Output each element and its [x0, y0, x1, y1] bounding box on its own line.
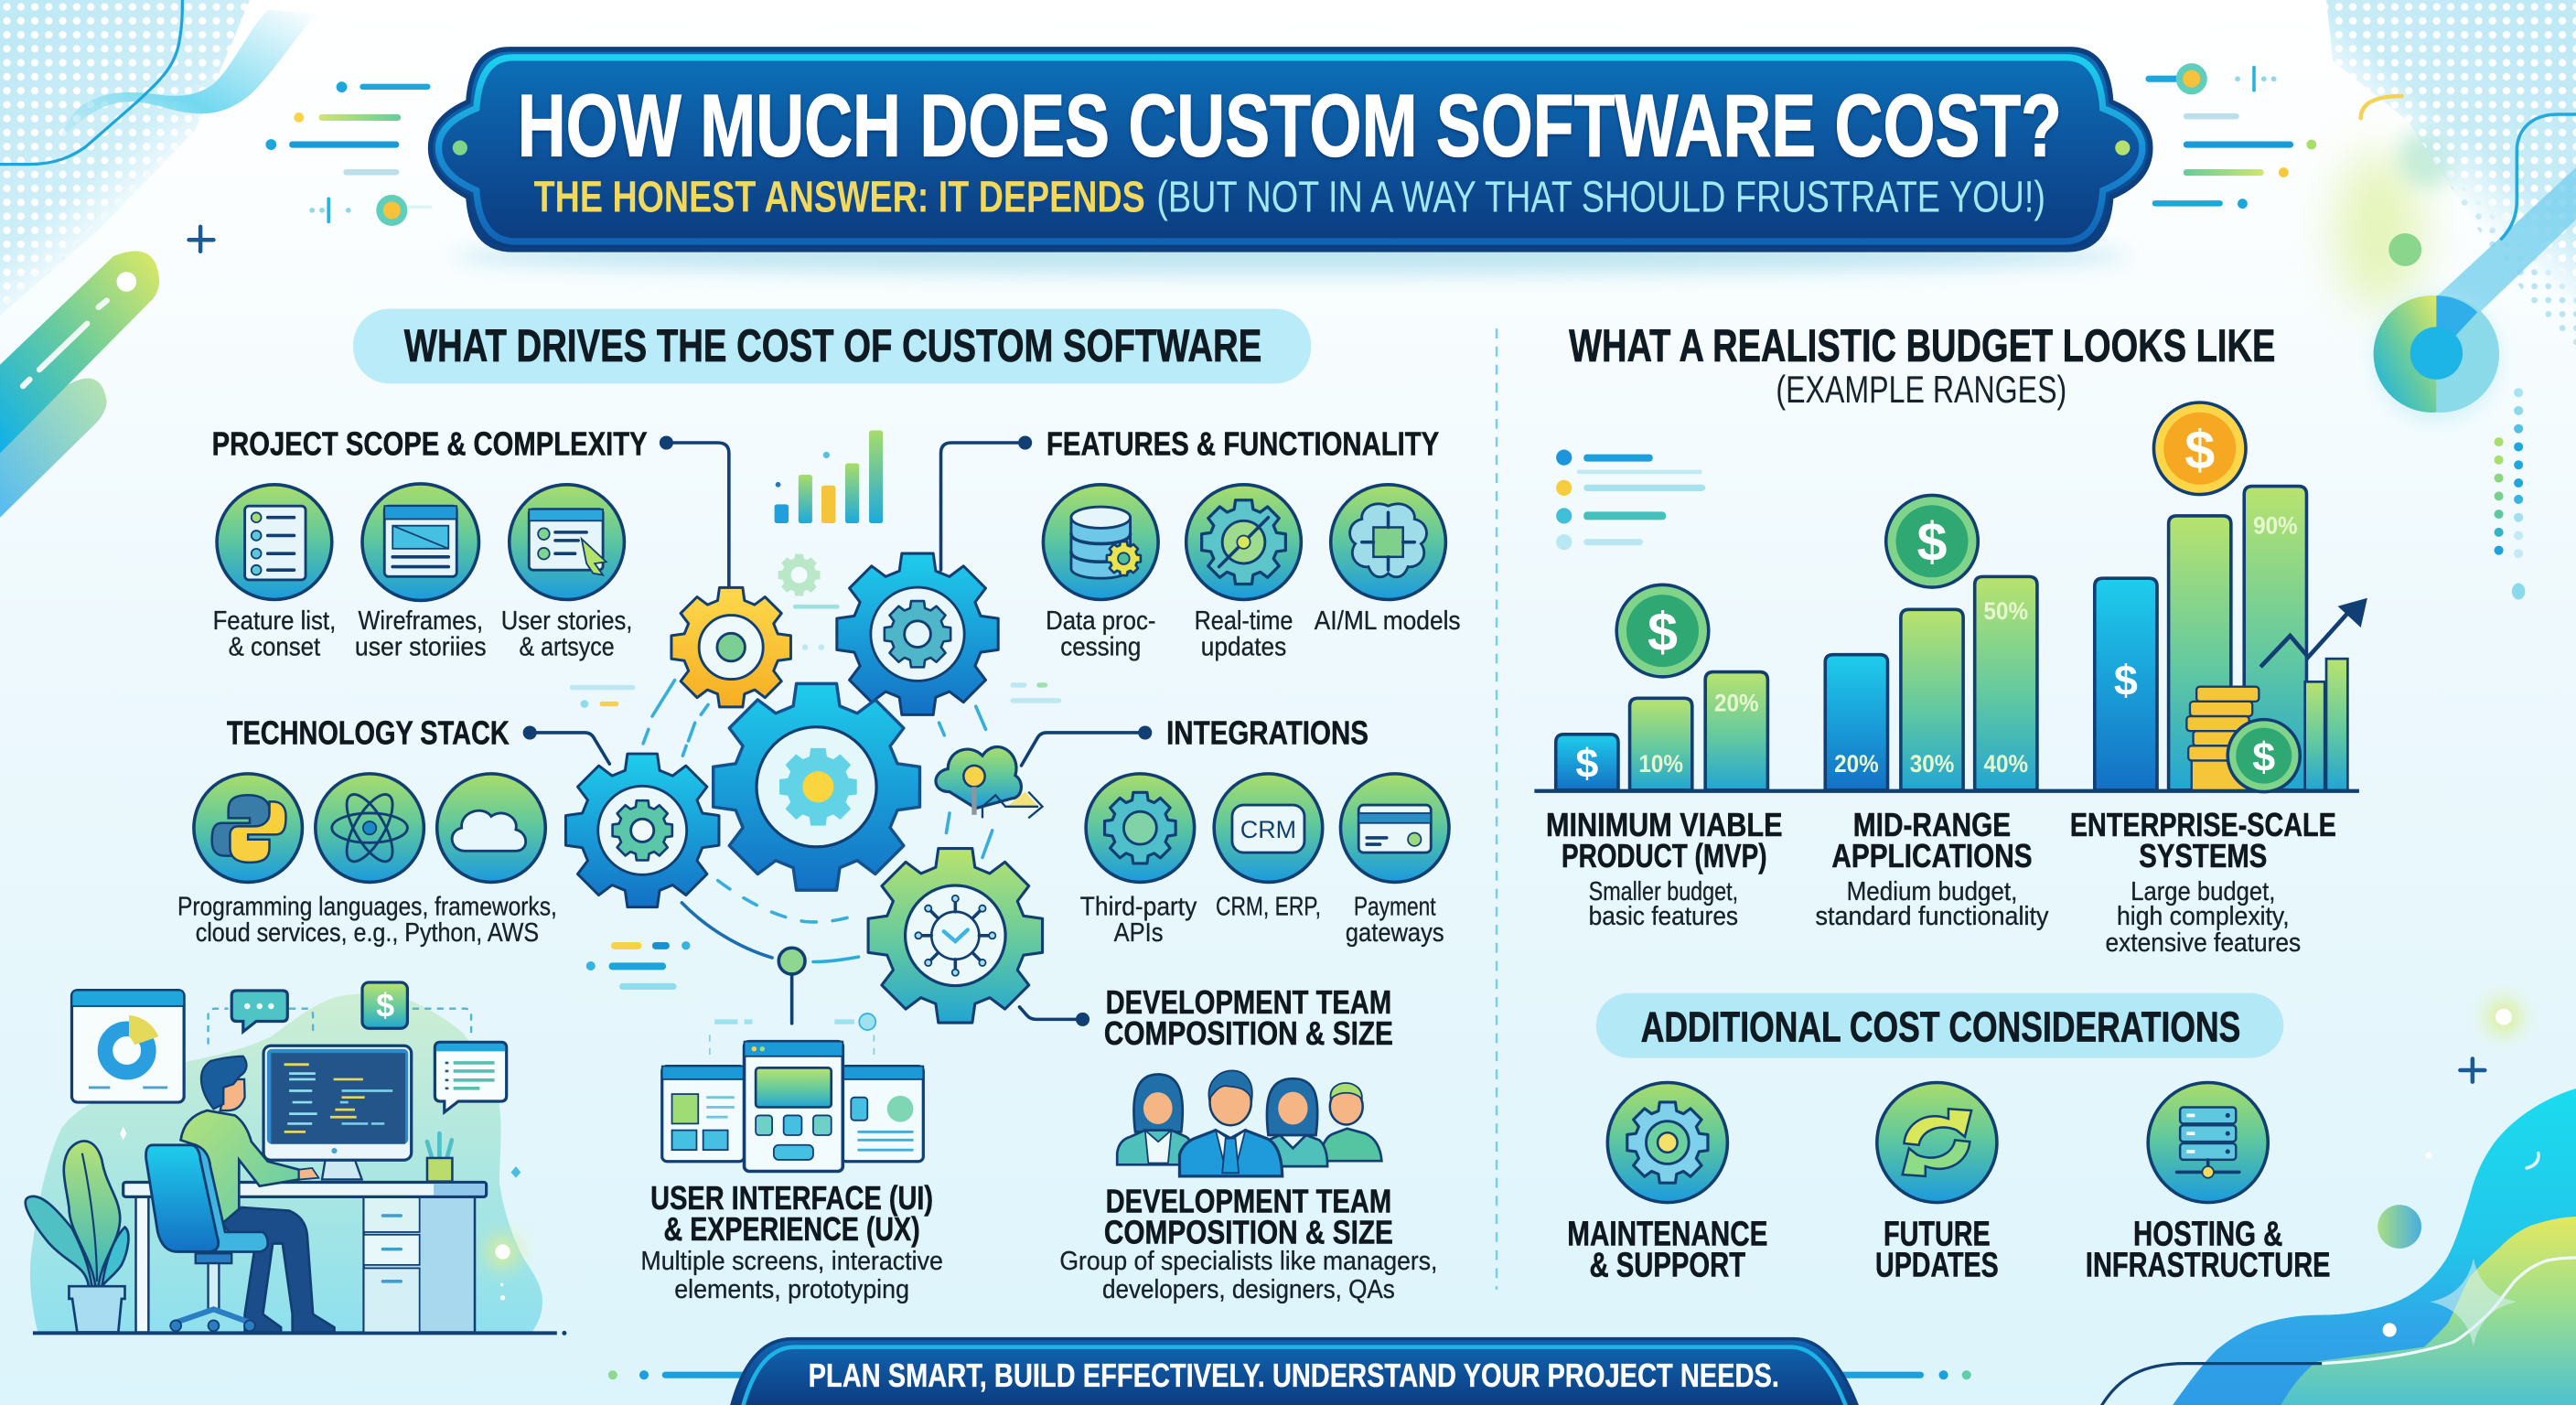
- item: maintenance and support: [1567, 1083, 1767, 1283]
- icon: UI screens: [662, 1014, 923, 1171]
- icon: real-time updates: [1186, 485, 1301, 600]
- title text: HOW MUCH DOES CUSTOM SOFTWARE COST?: [518, 76, 2062, 176]
- labels: features items: [1046, 606, 1461, 662]
- icon: third-party APIs: [1086, 774, 1195, 882]
- label: mid-range applications: standard functionality: [1815, 902, 2049, 931]
- group: MVP bars: [1556, 672, 1767, 790]
- label: hosting: INFRASTRUCTURE: [2086, 1245, 2331, 1283]
- plant: [26, 1141, 128, 1332]
- icon: green coin mid-range: $: [1917, 510, 1948, 572]
- subtitle: [534, 173, 2045, 222]
- icon: data processing: [1043, 485, 1158, 600]
- heading pill: additional cost considerations: ADDITIONAL COST CONSIDERATIONS: [1641, 1003, 2240, 1051]
- labels: project scope items: user storiies: [355, 633, 487, 662]
- description: development team: Group of specialists like managers,: [1059, 1247, 1437, 1276]
- description: UI and UX: Multiple screens, interactive: [640, 1247, 943, 1276]
- icon: python: [194, 774, 302, 882]
- illustration: developer at desk: [26, 982, 566, 1335]
- description: UI and UX: elements, prototyping: [674, 1275, 909, 1304]
- subtitle: THE HONEST ANSWER: IT DEPENDS: [534, 173, 1145, 222]
- labels: features items: AI/ML models: [1315, 606, 1461, 636]
- group: mid-range bars: 40%: [1984, 750, 2028, 778]
- labels: features items: cessing: [1060, 633, 1141, 662]
- icon: gold coin enterprise: $: [2184, 419, 2215, 480]
- chart: small bars above gears: [775, 431, 883, 523]
- section: realistic budget heading: WHAT A REALISTIC BUDGET LOOKS LIKE: [1569, 319, 2275, 371]
- icon: cloud services: [437, 774, 545, 882]
- section: features and functionality: FEATURES & FUNCTIONALITY: [1046, 424, 1439, 462]
- section: integrations: INTEGRATIONS: [1166, 714, 1368, 752]
- labels: features items: Data proc-: [1046, 606, 1155, 636]
- icon: gold coin enterprise: [2153, 402, 2246, 495]
- label: mid-range applications: APPLICATIONS: [1831, 837, 2033, 874]
- heading: UI and UX: & EXPERIENCE (UX): [664, 1210, 920, 1248]
- person torso: [181, 1056, 318, 1224]
- icon: green coin MVP: [1616, 585, 1709, 677]
- label: enterprise-scale systems: [2070, 806, 2336, 958]
- person: woman right: [1267, 1078, 1327, 1166]
- gear: blue top right: [837, 553, 998, 714]
- heading: development team: DEVELOPMENT TEAM: [1106, 1182, 1391, 1219]
- person: woman left: [1117, 1075, 1195, 1164]
- dollar tile: $: [376, 987, 394, 1024]
- icon: CRM: CRM: [1240, 816, 1296, 843]
- icon: coin stack and rising arrow: [2186, 598, 2367, 792]
- label: minimum viable product: Smaller budget,: [1589, 877, 1738, 906]
- dollar tile: [362, 982, 407, 1028]
- label: enterprise-scale systems: high complexity,: [2117, 902, 2290, 931]
- decoration: top-right bars: [2145, 63, 2316, 209]
- group: mid-range bars: [1825, 576, 2037, 790]
- icon: feature list: [217, 485, 332, 600]
- section: integrations: [1022, 714, 1449, 948]
- label: future updates: [1875, 1214, 1999, 1283]
- labels: project scope items: & conset: [229, 633, 320, 662]
- section: realistic budget heading: (EXAMPLE RANGES): [1776, 369, 2066, 411]
- label: future updates: FUTURE: [1884, 1214, 1991, 1252]
- group: mid-range bars: 30%: [1910, 750, 1954, 778]
- heading: development team: COMPOSITION & SIZE: [1104, 1214, 1393, 1251]
- speech bubble: [231, 991, 287, 1032]
- icon: server rack: [2148, 1083, 2268, 1203]
- section: features and functionality: [941, 424, 1461, 662]
- chair: [146, 1145, 268, 1331]
- desk: [123, 1133, 487, 1332]
- icon: small pale gear: [778, 554, 820, 596]
- label: mid-range applications: Medium budget,: [1847, 877, 2017, 906]
- group: enterprise bars: [2095, 487, 2347, 790]
- section: technology stack: [177, 714, 609, 948]
- labels: project scope items: Wireframes,: [359, 606, 483, 636]
- label: enterprise-scale systems: SYSTEMS: [2139, 837, 2267, 874]
- dashboard window: [71, 991, 184, 1102]
- description: UI and UX: [640, 1247, 943, 1304]
- icon: refresh arrows: [1877, 1083, 1997, 1203]
- icon: green coin MVP: $: [1648, 601, 1678, 662]
- label: minimum viable product: PRODUCT (MVP): [1562, 837, 1767, 874]
- decoration: top-left bars: [265, 81, 432, 226]
- label: minimum viable product: [1546, 806, 1783, 931]
- section: development team people: [1059, 1070, 1437, 1304]
- group: MVP bars: $: [1575, 739, 1598, 786]
- decoration: top-right corner: [2326, 0, 2576, 600]
- group: enterprise bars: $: [2114, 657, 2138, 704]
- labels: integrations: [1080, 892, 1444, 948]
- monitor: [263, 1046, 412, 1179]
- icon: wireframes: [362, 484, 479, 600]
- label: minimum viable product: basic features: [1589, 902, 1738, 931]
- icon: connector pin: [778, 948, 805, 974]
- right speech bubble: [435, 1042, 507, 1112]
- gear: yellow: [671, 587, 790, 707]
- heading pill: what drives the cost: WHAT DRIVES THE COST OF CUSTOM SOFTWARE: [404, 319, 1261, 371]
- person legs: [220, 1207, 334, 1332]
- label: mid-range applications: MID-RANGE: [1853, 806, 2011, 843]
- footer banner: [731, 1339, 1858, 1405]
- label: enterprise-scale systems: extensive features: [2105, 928, 2301, 958]
- icon: maintenance gear: [1607, 1083, 1727, 1203]
- label: minimum viable product: MINIMUM VIABLE: [1546, 806, 1783, 843]
- icon: AI brain: [1331, 485, 1445, 600]
- label: maintenance: & SUPPORT: [1590, 1245, 1745, 1283]
- heading: UI and UX: [650, 1179, 933, 1248]
- labels: integrations: Payment: [1354, 892, 1436, 921]
- section: development team heading: COMPOSITION & SIZE: [1104, 1014, 1393, 1052]
- icon: green coin mid-range: [1886, 495, 1978, 587]
- decoration: small bars beside pin: [586, 941, 690, 990]
- heading pill: what drives the cost: [353, 309, 1311, 383]
- group: enterprise bars: 90%: [2253, 512, 2298, 540]
- label: maintenance: [1567, 1214, 1767, 1283]
- footer banner: PLAN SMART, BUILD EFFECTIVELY. UNDERSTAND YOUR PROJECT NEEDS.: [809, 1357, 1779, 1394]
- label: enterprise-scale systems: ENTERPRISE-SCALE: [2070, 806, 2336, 843]
- labels: integrations: CRM, ERP,: [1216, 892, 1321, 921]
- labels: features items: Real-time: [1195, 606, 1293, 636]
- subtitle: (BUT NOT IN A WAY THAT SHOULD FRUSTRATE YOU!): [1156, 173, 2045, 222]
- label: maintenance: MAINTENANCE: [1567, 1214, 1767, 1252]
- labels: technology stack: [177, 892, 557, 948]
- group: MVP bars: 10%: [1638, 750, 1683, 778]
- item: hosting and infrastructure: [2086, 1083, 2331, 1283]
- description: development team: developers, designers, QAs: [1102, 1275, 1395, 1304]
- labels: project scope items: [213, 606, 632, 662]
- gear: green bottom right: [868, 849, 1043, 1023]
- group: mid-range bars: 50%: [1984, 597, 2028, 625]
- label: future updates: UPDATES: [1875, 1245, 1999, 1283]
- section: technology stack: TECHNOLOGY STACK: [227, 714, 510, 752]
- icon: user stories: [510, 485, 624, 600]
- labels: project scope items: & artsyce: [520, 633, 615, 662]
- section: development team heading: DEVELOPMENT TEAM: [1106, 983, 1391, 1021]
- icon: cloud with bulb: [936, 747, 1043, 818]
- heading pill: additional cost considerations: [1596, 993, 2283, 1058]
- label: hosting: [2086, 1214, 2331, 1283]
- icon: CRM: [1214, 774, 1323, 882]
- gear: large central: [714, 683, 919, 890]
- label: hosting: HOSTING &: [2133, 1214, 2282, 1252]
- section: realistic budget heading: [1569, 319, 2275, 411]
- labels: technology stack: cloud services, e.g., Python, AWS: [196, 918, 539, 948]
- group: MVP bars: 20%: [1714, 690, 1759, 717]
- heading: UI and UX: USER INTERFACE (UI): [650, 1179, 933, 1217]
- chart: budget bars: [1534, 487, 2359, 791]
- icon: payment card: [1340, 774, 1449, 882]
- legend: chart key: [1556, 450, 1705, 550]
- person: man centre: [1179, 1070, 1283, 1176]
- item: future updates: [1875, 1083, 1999, 1283]
- section: user interface and experience: [640, 1014, 943, 1304]
- title banner: [431, 49, 2151, 274]
- label: enterprise-scale systems: Large budget,: [2131, 877, 2275, 906]
- section: project scope and complexity: PROJECT SCOPE & COMPLEXITY: [212, 424, 648, 462]
- decoration: bottom-right blob: [2101, 999, 2576, 1405]
- labels: project scope items: Feature list,: [213, 606, 336, 636]
- gear: blue left: [565, 754, 719, 907]
- section: development team heading: [1020, 983, 1393, 1052]
- labels: technology stack: Programming languages, frameworks,: [177, 892, 557, 921]
- dashed links: [209, 1009, 471, 1045]
- icon: coin stack and rising arrow: $: [2252, 733, 2275, 779]
- labels: integrations: APIs: [1114, 918, 1164, 948]
- footer decorations: [608, 1370, 1971, 1379]
- description: development team: [1059, 1247, 1437, 1304]
- labels: integrations: gateways: [1346, 918, 1444, 948]
- icon: team: [1117, 1070, 1381, 1176]
- decoration: top-left corner: [0, 0, 317, 518]
- labels: features items: updates: [1201, 633, 1286, 662]
- label: mid-range applications: [1815, 806, 2049, 931]
- decoration: small bars among gears: [570, 605, 1061, 708]
- icon: atom: [316, 774, 424, 882]
- labels: project scope items: User stories,: [501, 606, 632, 636]
- orbit: dashed connectors around gears: [643, 681, 993, 1024]
- labels: integrations: Third-party: [1080, 892, 1197, 921]
- heading: development team: [1104, 1182, 1393, 1251]
- section: project scope and complexity: [212, 424, 729, 662]
- group: mid-range bars: 20%: [1834, 750, 1879, 778]
- person: man right: [1319, 1083, 1381, 1161]
